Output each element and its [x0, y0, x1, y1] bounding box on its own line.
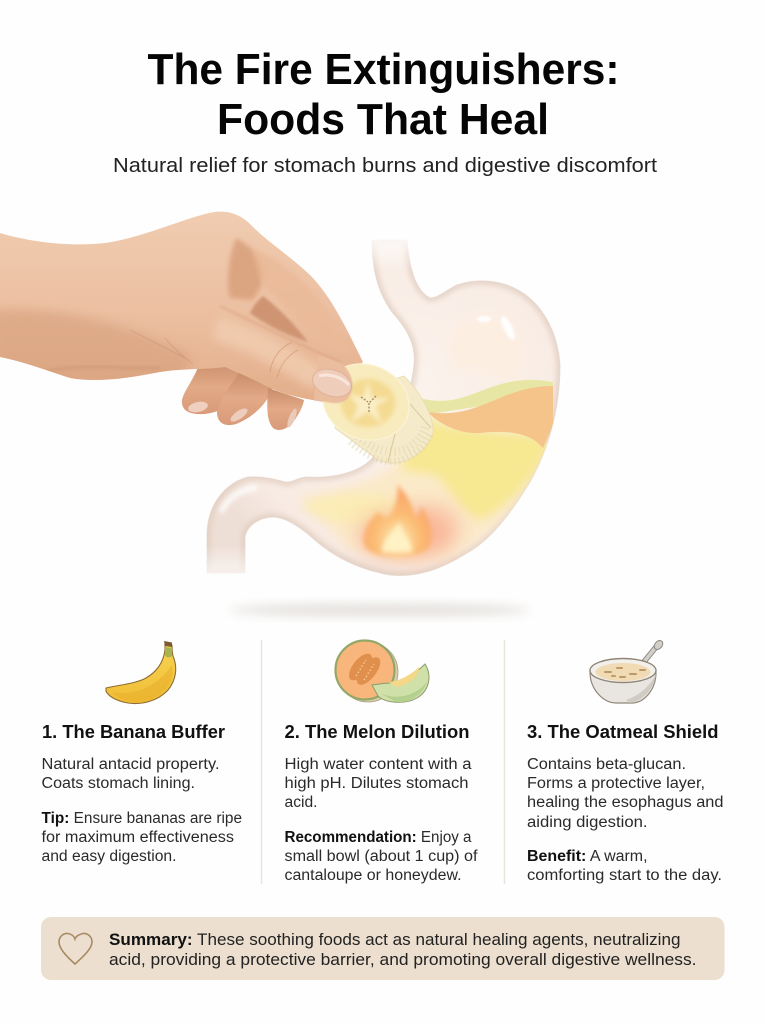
- title: Foods That Heal: [217, 95, 549, 144]
- hand wrinkles: [130, 330, 193, 364]
- heading: 1. The Banana Buffer: [42, 721, 225, 742]
- description: Contains beta-glucan.: [527, 756, 686, 773]
- description: [284, 756, 472, 811]
- description: Coats stomach lining.: [42, 775, 195, 792]
- banana seeds: [361, 396, 376, 412]
- title: [148, 45, 620, 144]
- thumb nail: [309, 364, 355, 402]
- heading: 3. The Oatmeal Shield: [527, 721, 718, 742]
- tip: for maximum effectiveness: [42, 829, 234, 846]
- tip: Tip: Ensure bananas are ripe: [42, 810, 242, 827]
- icon: melon: [336, 640, 429, 702]
- banana body: [335, 376, 433, 463]
- reddish glow: [357, 511, 453, 559]
- tip: and easy digestion.: [42, 848, 176, 865]
- esophagus fade: [360, 232, 420, 272]
- icon: banana: [106, 641, 176, 703]
- recommendation: cantaloupe or honeydew.: [284, 867, 462, 884]
- lower pale peach belly: [302, 462, 527, 565]
- column 3: the oatmeal shield: [527, 639, 724, 884]
- thumb upper crease: [220, 306, 340, 362]
- tip: [42, 810, 242, 865]
- knuckle shadow: [228, 238, 264, 300]
- description: [527, 756, 724, 831]
- lower yellow fluid: [400, 410, 550, 520]
- column dividers: [262, 640, 504, 884]
- summary panel: [41, 917, 724, 980]
- title: The Fire Extinguishers:: [148, 45, 620, 94]
- recommendation: Recommendation: Enjoy a: [284, 829, 472, 846]
- description: aiding digestion.: [527, 814, 648, 831]
- thumb light: [215, 328, 320, 380]
- flame: [364, 484, 432, 557]
- thumb knuckle creases: [270, 342, 298, 378]
- banana slice: [311, 351, 433, 463]
- banana face: [311, 351, 421, 453]
- orange layer: [428, 386, 553, 448]
- benefit: [527, 848, 722, 884]
- column 1: the banana buffer: [42, 641, 242, 865]
- yellow-green top layer: [420, 380, 553, 414]
- summary text: Summary: These soothing foods act as natural healing agents, neutralizing: [109, 930, 680, 949]
- recommendation: small bowl (about 1 cup) of: [284, 848, 478, 865]
- description: high pH. Dilutes stomach: [284, 775, 468, 792]
- summary text: [109, 930, 696, 969]
- palm and arm: [0, 212, 363, 403]
- stomach: [198, 232, 560, 587]
- wrist inner shadow: [48, 370, 50, 372]
- wrist and back-of-hand shade: [0, 309, 190, 385]
- ground shadow: [230, 603, 530, 617]
- benefit: comforting start to the day.: [527, 867, 722, 884]
- heading: 2. The Melon Dilution: [284, 721, 470, 742]
- recommendation: [284, 829, 478, 884]
- fingernails: [187, 400, 209, 414]
- benefit: Benefit: A warm,: [527, 848, 648, 865]
- description: healing the esophagus and: [527, 794, 724, 811]
- duodenum fade: [198, 545, 256, 587]
- icon: heart: [59, 933, 92, 964]
- stomach wall shading: [207, 240, 560, 575]
- duodenum highlight: [222, 488, 255, 510]
- description: High water content with a: [284, 756, 472, 773]
- illustration: hand, stomach and banana slice: [0, 212, 560, 617]
- index finger side: [255, 252, 320, 310]
- column 2: the melon dilution: [284, 640, 478, 884]
- curled middle finger fold: [250, 296, 308, 342]
- icon: oatmeal bowl: [590, 639, 664, 703]
- summary text: acid, providing a protective barrier, and promoting overall digestive wellness.: [109, 950, 696, 969]
- upper highlight: [446, 314, 524, 385]
- lower fingers: [182, 360, 304, 430]
- description: Forms a protective layer,: [527, 775, 705, 792]
- banana ribs: [350, 432, 431, 462]
- description: Natural antacid property.: [42, 756, 220, 773]
- description: acid.: [284, 794, 318, 811]
- hand: [0, 212, 363, 430]
- thumb tip over banana: [270, 342, 355, 403]
- description: [42, 756, 220, 792]
- subtitle: Natural relief for stomach burns and digestive discomfort: [113, 154, 657, 177]
